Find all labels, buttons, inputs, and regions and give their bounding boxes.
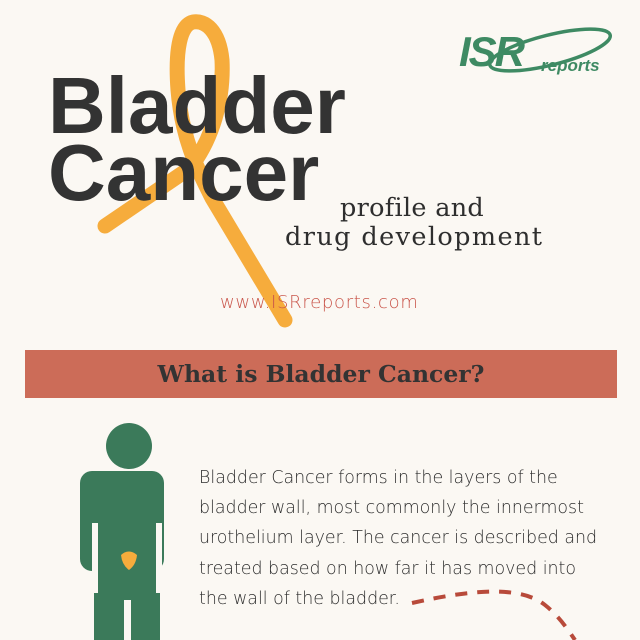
logo (459, 27, 612, 75)
logo: reports (541, 56, 600, 75)
title: Cancer (48, 128, 319, 217)
body text: treated based on how far it has moved into (199, 559, 576, 579)
body text: bladder wall, most commonly the innermost (199, 498, 584, 518)
title (48, 61, 346, 217)
banner (25, 350, 617, 398)
logo: ISR (459, 28, 523, 75)
subtitle: drug development (285, 222, 543, 252)
body text (199, 468, 597, 609)
subtitle: profile and (340, 193, 484, 223)
icon: person (80, 423, 164, 640)
banner: What is Bladder Cancer? (158, 360, 484, 388)
title: Bladder (48, 61, 346, 150)
body text: Bladder Cancer forms in the layers of the (199, 468, 558, 488)
body text: urothelium layer. The cancer is described and (199, 528, 597, 548)
url: www.ISRreports.com (220, 292, 419, 313)
body text: the wall of the bladder. (199, 589, 400, 609)
subtitle (285, 193, 543, 252)
